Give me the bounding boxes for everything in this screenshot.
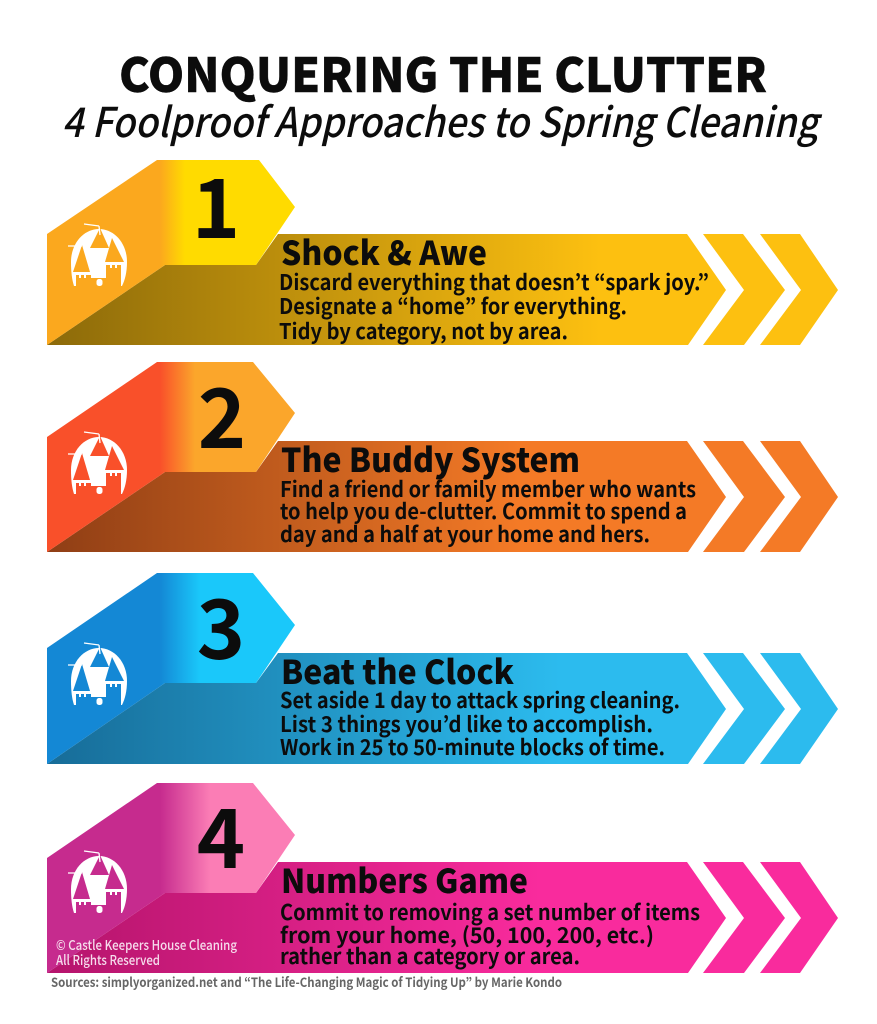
body 1: Designate a “home” for everything.: [279, 290, 627, 321]
body 4: from your home, (50, 100, 200, etc.): [280, 919, 654, 950]
number 1: 1: [192, 143, 240, 262]
body 2: to help you de-clutter. Commit to spend a: [280, 495, 687, 526]
panel: approach 2: [47, 353, 838, 552]
body 2: Find a friend or family member who wants: [280, 473, 696, 504]
number flag 3: [47, 573, 295, 764]
icon: castle 2: [68, 432, 127, 495]
main arrow 3: [47, 653, 726, 764]
number flag 2: [47, 362, 295, 552]
main arrow 2: [47, 441, 726, 552]
body 4: Commit to removing a set number of items: [280, 896, 700, 927]
title: CONQUERING THE CLUTTER: [119, 37, 767, 106]
body 2: day and a half at your home and hers.: [280, 518, 650, 549]
main arrow 1: [47, 234, 726, 345]
chevrons 3: [703, 653, 838, 764]
number flag 4: [47, 783, 295, 973]
number flag 1: [47, 160, 295, 345]
panel: approach 1: [47, 143, 838, 346]
number 3: 3: [197, 564, 245, 683]
body 3: Set aside 1 day to attack spring cleaning.: [280, 684, 680, 715]
subtitle: 4 Foolproof Approaches to Spring Cleaning: [62, 89, 823, 149]
body 4: rather than a category or area.: [280, 940, 580, 971]
heading 2: The Buddy System: [281, 434, 580, 482]
body 3: Work in 25 to 50-minute blocks of time.: [280, 731, 665, 762]
heading 1: Shock & Awe: [281, 227, 487, 275]
body 3: List 3 things you’d like to accomplish.: [280, 708, 653, 739]
number 4: 4: [197, 773, 245, 892]
body 1: Tidy by category, not by area.: [279, 315, 568, 346]
body 3: [280, 684, 680, 762]
chevrons 4: [703, 862, 838, 973]
icon: castle 3: [68, 643, 127, 706]
heading 3: Beat the Clock: [281, 646, 514, 694]
chevrons 1: [703, 234, 838, 345]
copyright: All Rights Reserved: [56, 949, 160, 969]
copyright: [56, 934, 237, 969]
copyright: © Castle Keepers House Cleaning: [56, 934, 237, 954]
body 1: Discard everything that doesn’t “spark joy.”: [279, 266, 709, 297]
body 1: [279, 266, 709, 346]
panel: approach 4: [47, 773, 838, 973]
icon: castle 1: [68, 224, 127, 287]
icon: castle 4: [68, 851, 127, 914]
panel: approach 3: [47, 564, 838, 764]
chevrons 2: [703, 441, 838, 552]
heading 4: Numbers Game: [281, 855, 528, 903]
main arrow 4: [47, 862, 726, 973]
sources: Sources: simplyorganized.net and “The Life-Changing Magic of Tidying Up” by Marie Kondo: [51, 972, 562, 991]
body 4: [280, 896, 700, 971]
body 2: [280, 473, 696, 549]
number 2: 2: [198, 353, 246, 472]
